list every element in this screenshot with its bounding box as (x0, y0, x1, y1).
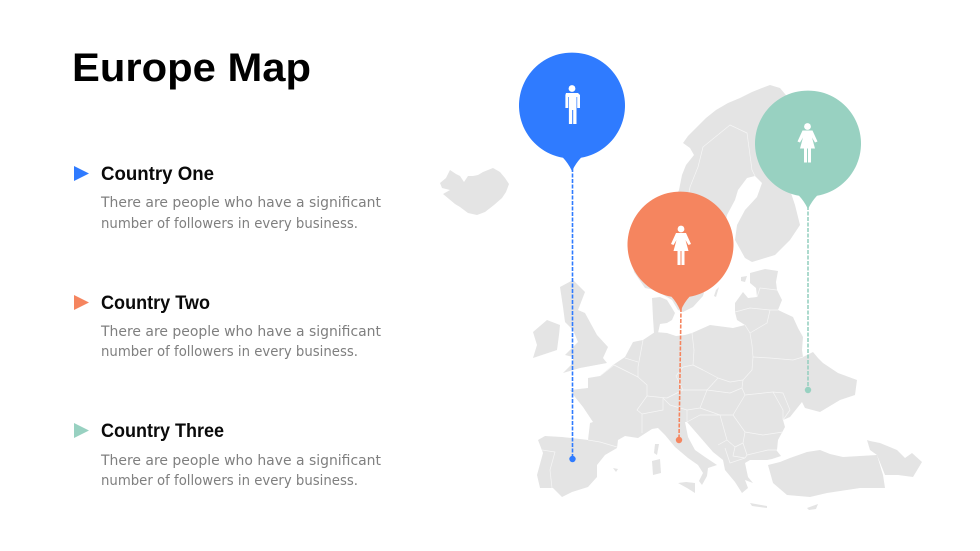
icon: woman (671, 226, 691, 265)
Gotland (714, 287, 719, 297)
Saaremaa (741, 276, 747, 282)
Denmark (652, 297, 675, 333)
legend item: Country Three (74, 421, 381, 489)
description: Country Three: There are people who have a significant (100, 453, 381, 469)
description: Country One: number of followers in every business. (101, 216, 358, 232)
orange location dot (676, 437, 682, 443)
blue dashed leader line (572, 168, 574, 459)
description: Country Two: There are people who have a significant (100, 324, 381, 340)
teal dashed leader line (807, 206, 809, 390)
Mallorca (613, 468, 618, 472)
orange dashed leader line (679, 308, 681, 440)
description: Country Three: number of followers in every business. (101, 473, 358, 489)
blue location dot (569, 456, 576, 462)
Turkey (768, 450, 885, 497)
Crete (750, 503, 767, 508)
icon: orange triangle marker (74, 295, 89, 310)
heading: Country Two: Country Two (101, 293, 210, 314)
blue balloon (519, 53, 625, 171)
icon: woman (798, 123, 818, 162)
map of Europe (440, 85, 922, 510)
legend item: Country Two (74, 293, 381, 360)
Sicily (678, 482, 695, 493)
blue pin (519, 53, 625, 462)
description: Country Two: number of followers in every business. (101, 344, 358, 360)
Ireland (533, 320, 560, 358)
heading: Country Three: Country Three (101, 421, 224, 442)
Scandinavia and Finland (632, 85, 820, 312)
Iceland (440, 168, 509, 215)
description: Country Three (100, 453, 381, 489)
description: Country One (100, 195, 381, 232)
description: Country One: There are people who have a significant (100, 195, 381, 211)
icon: man (565, 85, 580, 124)
legend item: Country One (74, 164, 381, 232)
icon: blue triangle marker (74, 166, 89, 181)
country borders (542, 125, 803, 488)
icon: teal triangle marker (74, 423, 89, 438)
Caucasus (858, 437, 922, 477)
teal balloon (755, 91, 861, 209)
Thrace (767, 451, 781, 460)
Corsica (654, 444, 659, 455)
orange balloon (628, 192, 734, 311)
teal pin (755, 91, 861, 393)
orange pin (628, 192, 734, 443)
Cyprus (807, 504, 818, 510)
teal location dot (805, 387, 811, 393)
Sardinia (652, 459, 661, 475)
heading: Country One: Country One (101, 164, 214, 185)
description: Country Two (100, 324, 381, 360)
title: Europe Map (72, 46, 311, 90)
Great Britain (560, 280, 608, 373)
continental Europe landmass (537, 269, 857, 497)
